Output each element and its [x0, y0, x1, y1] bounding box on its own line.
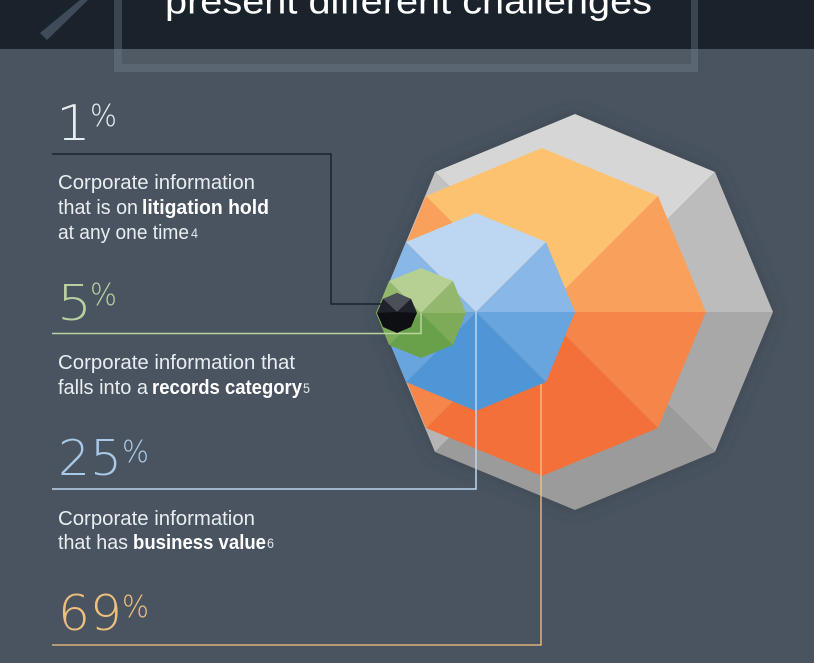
- stat: 69%: [58, 585, 149, 642]
- text: records category: [58, 352, 310, 399]
- stat: 25%: [58, 430, 149, 487]
- icon: diagonal stroke: [40, 0, 88, 40]
- text: business value: that has: [58, 532, 128, 554]
- stat: 5%: %: [90, 278, 117, 313]
- shadow: [377, 114, 773, 510]
- stat: 1%: [56, 95, 117, 152]
- connector: 5%: [52, 313, 421, 334]
- text: litigation hold: 4: [191, 225, 198, 241]
- connector: 25%: [52, 312, 476, 489]
- stat: 25%: 25: [58, 430, 122, 487]
- text: records category: 5: [303, 380, 310, 396]
- text: records category: records category: [152, 377, 303, 399]
- octagon: green 5%: [376, 268, 466, 358]
- text: litigation hold: at any one time: [58, 222, 189, 244]
- text: business value: business value: [133, 532, 266, 554]
- title frame: [114, 0, 698, 72]
- text: records category: Corporate information that: [58, 352, 295, 374]
- text: business value: Corporate information: [58, 508, 255, 530]
- octagon: black 1%: [377, 293, 417, 333]
- stat: 1%: %: [90, 99, 117, 134]
- connector: 69%: [52, 384, 541, 645]
- octagon: gray 100%: [377, 114, 773, 510]
- octagon: orange 69%: [378, 148, 706, 476]
- header band: [0, 0, 814, 49]
- stat: 69%: 69: [58, 585, 122, 642]
- text: litigation hold: litigation hold: [142, 197, 269, 219]
- stat: 5%: 5: [57, 275, 92, 332]
- stat: 1%: 1: [56, 95, 91, 152]
- connector: 1%: [52, 154, 385, 304]
- octagon: blue 25%: [377, 213, 575, 411]
- text: litigation hold: that is on: [58, 197, 138, 219]
- text: business value: 6: [267, 535, 274, 551]
- text: business value: [58, 508, 274, 554]
- stat: 5%: [57, 275, 117, 332]
- text: litigation hold: [58, 172, 269, 244]
- text: records category: falls into a: [58, 377, 149, 399]
- stat: 25%: %: [122, 435, 149, 470]
- text: litigation hold: Corporate information: [58, 172, 255, 194]
- stat: 69%: %: [122, 590, 149, 625]
